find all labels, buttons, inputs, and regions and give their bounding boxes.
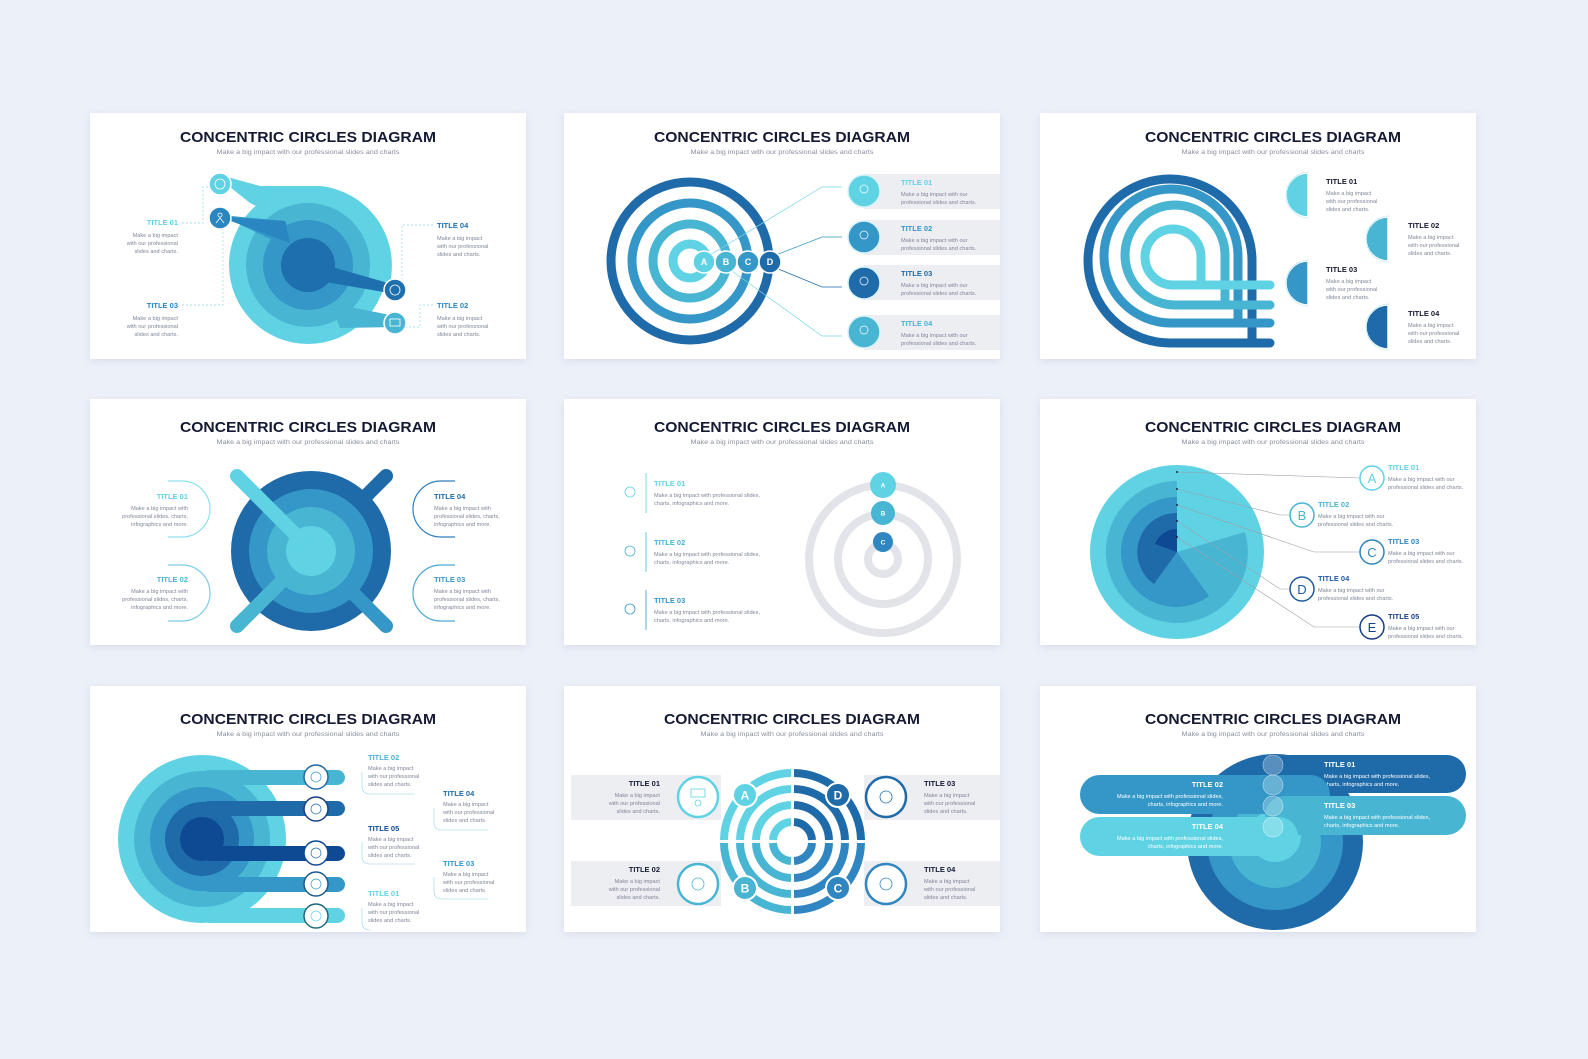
titles: professional slides and charts. [1388, 634, 1464, 640]
text: title 03 [126, 301, 178, 338]
slide 2: target rings with ABCD [564, 113, 1000, 359]
icon: person [209, 207, 231, 229]
slide 7: circles with horizontal bars [90, 686, 526, 932]
slide 3: nested arches [1040, 113, 1476, 359]
slide 2: target rings with ABCD: D [767, 257, 774, 267]
text: title 02: TITLE 02 [437, 301, 468, 310]
slide 6: sector circles with A-E: D [1297, 582, 1307, 597]
bars and circles [231, 471, 391, 631]
subtitle: Make a big impact with our professional slides and charts [216, 439, 400, 446]
titles: TITLE 01 [157, 492, 188, 501]
list items: TITLE 02 [654, 538, 685, 547]
titles: professional slides and charts. [901, 246, 977, 252]
text: title 03: Make a big impact [133, 316, 178, 322]
icon circles [848, 175, 880, 348]
slide 7: circles with horizontal bars: Make a big impact [368, 837, 414, 843]
titles: slides and charts. [616, 895, 660, 901]
slide 7: circles with horizontal bars: slides and charts. [443, 888, 487, 894]
slide 7: circles with horizontal bars: Make a big impact [443, 872, 489, 878]
title: CONCENTRIC CIRCLES DIAGRAM [1145, 419, 1401, 436]
list items: TITLE 03 [654, 596, 685, 605]
slide 4: circles with X bars: infographics and more. [434, 605, 491, 611]
titles: Make a big impact with our [1388, 551, 1455, 557]
slide 8: quadrant rings: Make a big impact [924, 879, 970, 885]
icon: top cyan [209, 173, 231, 195]
sector chart [1090, 465, 1264, 639]
titles: professional slides and charts. [1388, 559, 1464, 565]
titles: with our professional [1407, 331, 1459, 337]
slide 7: circles with horizontal bars: TITLE 05 [368, 824, 399, 833]
titles: professional slides and charts. [901, 291, 977, 297]
titles: Make a big impact with our [1388, 477, 1455, 483]
titles: slides and charts. [1326, 207, 1370, 213]
subtitle: Make a big impact with our professional slides and charts [1182, 149, 1365, 156]
titles: professional slides and charts. [1318, 522, 1394, 528]
title: CONCENTRIC CIRCLES DIAGRAM [1145, 129, 1401, 146]
slide 5: gray rings with ABC: A [881, 482, 886, 490]
slide 8: quadrant rings: with our professional [923, 801, 975, 807]
text: title 01: Make a big impact [133, 233, 178, 239]
diagram [220, 175, 395, 344]
pill: title 01: charts, infographics and more. [1324, 782, 1400, 788]
titles: Make a big impact with our [1388, 626, 1455, 632]
list items: Make a big impact with professional slides, [654, 552, 760, 558]
titles: infographics and more. [131, 522, 188, 528]
titles: TITLE 02 [1408, 221, 1439, 230]
titles: Make a big impact with our [901, 238, 968, 244]
slide 6: sector circles with A-E [1040, 399, 1476, 645]
slide 8: quadrant rings [564, 686, 1000, 932]
text: title 04: with our professional [436, 244, 488, 250]
titles: professional slides and charts. [901, 341, 977, 347]
slide 6: sector circles with A-E: A [1368, 471, 1377, 486]
icon circles [304, 765, 328, 928]
slide 6: sector circles with A-E: E [1368, 620, 1377, 635]
titles: TITLE 04 [901, 319, 933, 328]
slide 5: gray rings with ABC: C [881, 540, 886, 546]
text: title 01: TITLE 01 [147, 218, 178, 227]
titles: Make a big impact [1326, 279, 1372, 285]
slide 8: quadrant rings: TITLE 04 [924, 865, 956, 874]
titles: TITLE 04 [1318, 574, 1350, 583]
titles: TITLE 03 [901, 269, 932, 278]
titles: professional slides and charts. [1318, 596, 1394, 602]
slide 4: circles with X bars [90, 399, 526, 645]
slide 7: circles with horizontal bars: Make a big impact [368, 902, 414, 908]
titles: with our professional [1325, 199, 1377, 205]
titles: with our professional [1407, 243, 1459, 249]
slide 4: circles with X bars: infographics and more. [434, 522, 491, 528]
slide 8: quadrant rings: slides and charts. [924, 895, 968, 901]
slide 4: circles with X bars: Make a big impact with [434, 506, 491, 512]
slide 7: circles with horizontal bars: TITLE 03 [443, 859, 474, 868]
titles: Make a big impact [1408, 235, 1454, 241]
title: CONCENTRIC CIRCLES DIAGRAM [664, 711, 920, 728]
diagram [118, 755, 345, 923]
subtitle: Make a big impact with our professional slides and charts [1182, 439, 1365, 446]
title: CONCENTRIC CIRCLES DIAGRAM [654, 419, 910, 436]
titles: TITLE 03 [1326, 265, 1357, 274]
titles [901, 178, 977, 347]
titles [1325, 177, 1459, 345]
pill: title 04: charts, infographics and more. [1148, 844, 1223, 850]
slide 7: circles with horizontal bars: slides and charts. [443, 818, 487, 824]
title: CONCENTRIC CIRCLES DIAGRAM [180, 711, 436, 728]
slide 8: quadrant rings: B [741, 882, 750, 896]
titles: Make a big impact with our [901, 192, 968, 198]
subtitle: Make a big impact with our professional slides and charts [690, 149, 874, 156]
list items: charts, infographics and more. [654, 618, 730, 624]
subtitle: Make a big impact with our professional slides and charts [700, 731, 884, 738]
list items: Make a big impact with professional slides, [654, 493, 760, 499]
titles: Make a big impact with our [1318, 588, 1385, 594]
titles: TITLE 02 [629, 865, 660, 874]
slide 8: quadrant rings: with our professional [923, 887, 975, 893]
titles: TITLE 05 [1388, 612, 1419, 621]
titles: TITLE 02 [901, 224, 932, 233]
slide 8: quadrant rings: Make a big impact [924, 793, 970, 799]
titles: with our professional [608, 887, 660, 893]
pill: title 01: Make a big impact with professional slides, [1324, 774, 1430, 780]
text: title 01 [126, 218, 178, 255]
titles: infographics and more. [131, 605, 188, 611]
slide 7: circles with horizontal bars: with our professional [367, 774, 419, 780]
gray bands [571, 775, 1000, 906]
list items: charts, infographics and more. [654, 560, 730, 566]
pill: title 02 [1080, 775, 1330, 814]
markers ABC [870, 472, 896, 552]
slide 7: circles with horizontal bars: with our professional [442, 810, 494, 816]
titles: TITLE 01 [901, 178, 932, 187]
slide 7: circles with horizontal bars: slides and charts. [368, 782, 412, 788]
title: CONCENTRIC CIRCLES DIAGRAM [654, 129, 910, 146]
text: title 04: Make a big impact [437, 236, 483, 242]
slide 4: circles with X bars: professional slides, charts, [434, 597, 500, 603]
slide 1: concentric circles with tails [90, 113, 526, 359]
text: title 04 [436, 221, 488, 258]
letter circles [1290, 466, 1384, 639]
slide 4: circles with X bars: TITLE 03 [434, 575, 465, 584]
rings [724, 773, 861, 910]
slide 7: circles with horizontal bars: with our professional [367, 910, 419, 916]
titles: with our professional [608, 801, 660, 807]
slide 6: sector circles with A-E: C [1367, 545, 1377, 560]
rings [809, 485, 957, 633]
titles: with our professional [1325, 287, 1377, 293]
title: CONCENTRIC CIRCLES DIAGRAM [180, 129, 436, 146]
icon: right mid [384, 312, 406, 334]
titles [122, 492, 188, 611]
slide 7: circles with horizontal bars: with our professional [367, 845, 419, 851]
text: title 02: Make a big impact [437, 316, 483, 322]
slide 2: target rings with ABCD: C [745, 257, 752, 267]
slide 7: circles with horizontal bars: TITLE 02 [368, 753, 399, 762]
slide 9: circles with pills [1040, 686, 1476, 932]
titles: Make a big impact with our [901, 283, 968, 289]
slide 8: quadrant rings: C [834, 882, 843, 896]
slide 2: target rings with ABCD: A [701, 257, 708, 267]
titles: Make a big impact with [131, 506, 188, 512]
titles: slides and charts. [616, 809, 660, 815]
slide 2: target rings with ABCD: B [723, 257, 730, 267]
text: title 04: slides and charts. [437, 252, 481, 258]
titles: Make a big impact [615, 793, 660, 799]
half-disc icons [1286, 173, 1388, 349]
titles: slides and charts. [1326, 295, 1370, 301]
titles: Make a big impact [1408, 323, 1454, 329]
list items: charts, infographics and more. [654, 501, 730, 507]
rings [611, 182, 769, 340]
titles [608, 779, 660, 901]
subtitle: Make a big impact with our professional slides and charts [216, 731, 400, 738]
arches [1088, 179, 1270, 343]
icon: right dark [384, 279, 406, 301]
titles: professional slides and charts. [901, 200, 977, 206]
text: title 04: TITLE 04 [437, 221, 469, 230]
slide 4: circles with X bars: TITLE 04 [434, 492, 466, 501]
text: title 02: with our professional [436, 324, 488, 330]
pill: title 02: charts, infographics and more. [1148, 802, 1223, 808]
titles: Make a big impact with our [901, 333, 968, 339]
titles: professional slides, charts, [122, 597, 188, 603]
text: title 03: with our professional [126, 324, 178, 330]
titles: professional slides and charts. [1388, 485, 1464, 491]
pill: title 03: Make a big impact with professional slides, [1324, 815, 1430, 821]
pill: title 03 [1265, 796, 1466, 835]
text: title 02 [436, 301, 488, 338]
gray bands [864, 174, 1000, 350]
list items: TITLE 01 [654, 479, 685, 488]
slide 8: quadrant rings: slides and charts. [924, 809, 968, 815]
titles: TITLE 01 [1326, 177, 1357, 186]
titles: Make a big impact [615, 879, 660, 885]
brackets [168, 481, 455, 621]
text: title 02: slides and charts. [437, 332, 481, 338]
circles [1187, 754, 1363, 930]
subtitle: Make a big impact with our professional slides and charts [690, 439, 874, 446]
pill: title 04: Make a big impact with professional slides, [1117, 836, 1223, 842]
icon rings [678, 777, 906, 904]
text: title 01: slides and charts. [134, 249, 178, 255]
pill: title 04 [1080, 817, 1298, 856]
slide 8: quadrant rings: TITLE 03 [924, 779, 955, 788]
letters A-D [693, 251, 781, 273]
titles: Make a big impact with [131, 589, 188, 595]
pill: title 03: charts, infographics and more. [1324, 823, 1400, 829]
text: title 03: slides and charts. [134, 332, 178, 338]
pill: title 02: Make a big impact with professional slides, [1117, 794, 1223, 800]
titles: Make a big impact with our [1318, 514, 1385, 520]
slide 7: circles with horizontal bars: with our professional [442, 880, 494, 886]
titles: TITLE 02 [157, 575, 188, 584]
slide 7: circles with horizontal bars: slides and charts. [368, 853, 412, 859]
list items: Make a big impact with professional slides, [654, 610, 760, 616]
titles: TITLE 04 [1408, 309, 1440, 318]
slide 8: quadrant rings: A [741, 788, 750, 802]
titles: slides and charts. [1408, 339, 1452, 345]
slide 7: circles with horizontal bars: Make a big impact [368, 766, 414, 772]
list items [625, 473, 760, 630]
titles: TITLE 02 [1318, 500, 1349, 509]
slide 8: quadrant rings: D [834, 788, 843, 802]
connector lines [1177, 472, 1360, 627]
titles: TITLE 01 [629, 779, 660, 788]
slide 7: circles with horizontal bars: TITLE 04 [443, 789, 475, 798]
titles: TITLE 01 [1388, 463, 1419, 472]
pill: title 01 [1265, 755, 1466, 793]
connector lines [710, 187, 842, 336]
pill: title 01: TITLE 01 [1324, 760, 1355, 769]
letter markers [733, 783, 850, 900]
icons [1263, 755, 1283, 837]
slide 5: gray rings with ABC [564, 399, 1000, 645]
slide 4: circles with X bars: professional slides, charts, [434, 514, 500, 520]
titles: slides and charts. [1408, 251, 1452, 257]
subtitle: Make a big impact with our professional slides and charts [1182, 731, 1365, 738]
pill: title 03: TITLE 03 [1324, 801, 1355, 810]
slide 7: circles with horizontal bars: slides and charts. [368, 918, 412, 924]
text: title 03: TITLE 03 [147, 301, 178, 310]
titles [1318, 463, 1464, 640]
titles: professional slides, charts, [122, 514, 188, 520]
subtitle: Make a big impact with our professional slides and charts [216, 149, 400, 156]
title: CONCENTRIC CIRCLES DIAGRAM [1145, 711, 1401, 728]
text: title 01: with our professional [126, 241, 178, 247]
slide 6: sector circles with A-E: B [1298, 508, 1306, 523]
slide 4: circles with X bars: Make a big impact with [434, 589, 491, 595]
slide 7: circles with horizontal bars: TITLE 01 [368, 889, 399, 898]
pill: title 02: TITLE 02 [1192, 780, 1223, 789]
titles: TITLE 03 [1388, 537, 1419, 546]
slide 5: gray rings with ABC: B [881, 510, 886, 518]
text blocks [362, 772, 488, 930]
title: CONCENTRIC CIRCLES DIAGRAM [180, 419, 436, 436]
titles: Make a big impact [1326, 191, 1372, 197]
pill: title 04: TITLE 04 [1192, 822, 1224, 831]
slide 7: circles with horizontal bars: Make a big impact [443, 802, 489, 808]
